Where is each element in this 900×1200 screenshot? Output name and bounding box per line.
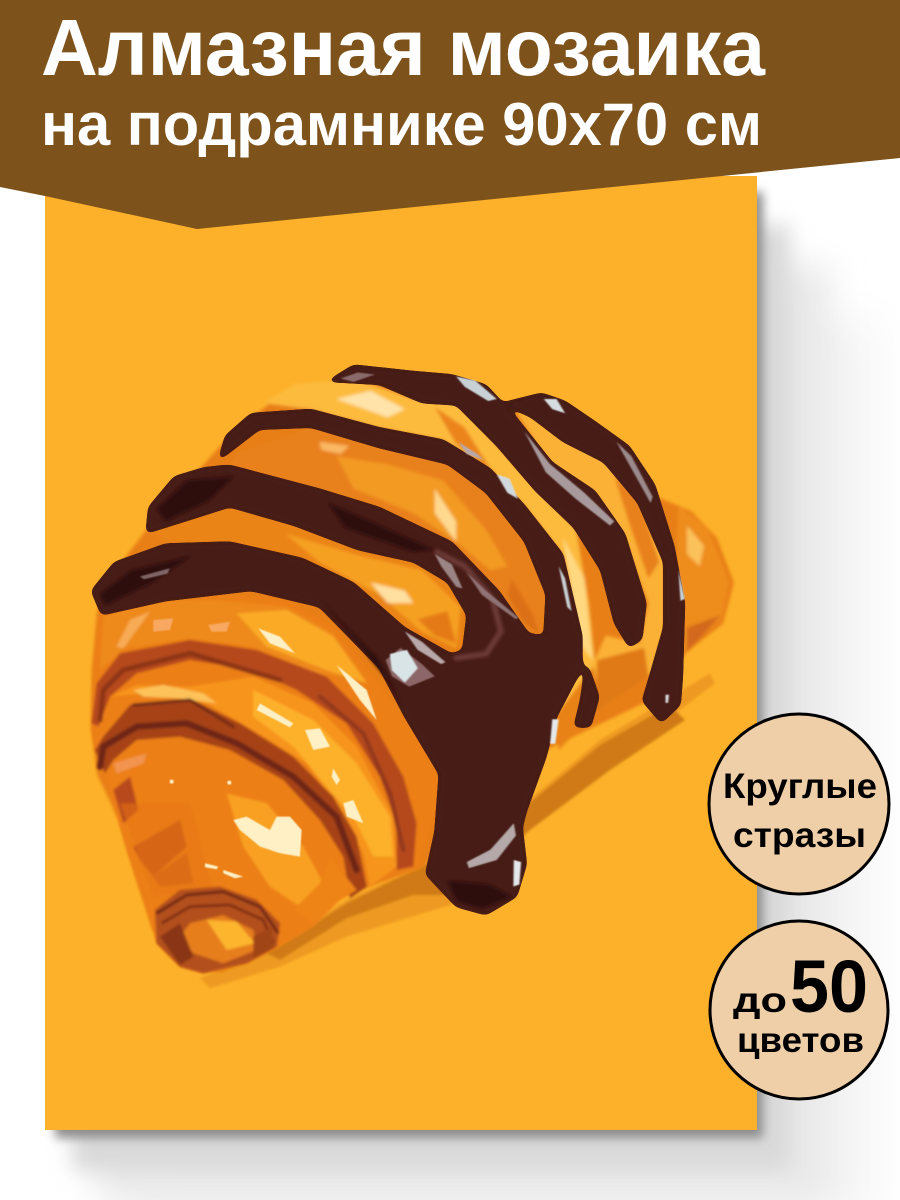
front lobe base (92, 593, 442, 973)
rust band 2 (95, 698, 367, 898)
croissant cast shadow (200, 673, 715, 988)
rust band 1 (92, 640, 417, 870)
lobe between second and third bands (230, 428, 546, 636)
badge text: colours: цветов (737, 1021, 864, 1060)
badge text: up to: до (733, 981, 787, 1020)
darker rims (99, 476, 512, 909)
left shading (113, 777, 138, 823)
badge text: 50: 50 (790, 945, 868, 1028)
right tip (676, 505, 730, 652)
main glaze with three bands (91, 409, 582, 915)
mid-tone ring (437, 552, 501, 658)
title line 1: Алмазная мозаика (41, 3, 765, 92)
badge text: line 1: Круглые (723, 767, 877, 806)
badge text: line 2: стразы (733, 816, 866, 855)
pastry cream highlights (153, 618, 377, 878)
title line 2: на подрамнике 90х70 см (41, 91, 762, 158)
gloss highlights (140, 372, 685, 887)
lobe under the fourth band (264, 379, 595, 717)
fourth band (326, 365, 646, 648)
fifth band (501, 393, 685, 723)
croissant upper lobes (91, 375, 734, 972)
chocolate shading and gloss (99, 372, 685, 909)
canvas shadow (55, 192, 875, 1200)
canvas background (45, 176, 757, 1130)
croissant spiral tip (155, 887, 280, 973)
title (41, 3, 765, 158)
lobe between first and second bands (153, 507, 465, 650)
header banner (0, 0, 900, 229)
yellow layer (110, 677, 397, 887)
lobe under the fifth band (516, 411, 666, 709)
croissant front lobe (92, 593, 442, 973)
chocolate drizzle (91, 365, 685, 915)
small drip (574, 660, 599, 727)
badge: round rhinestones (709, 714, 889, 894)
top section glow (100, 600, 367, 680)
croissant body base (91, 375, 734, 972)
illustration: chocolate croissant (91, 365, 734, 988)
badge: up to 50 colours (710, 921, 888, 1099)
bright lower centre (227, 793, 323, 907)
